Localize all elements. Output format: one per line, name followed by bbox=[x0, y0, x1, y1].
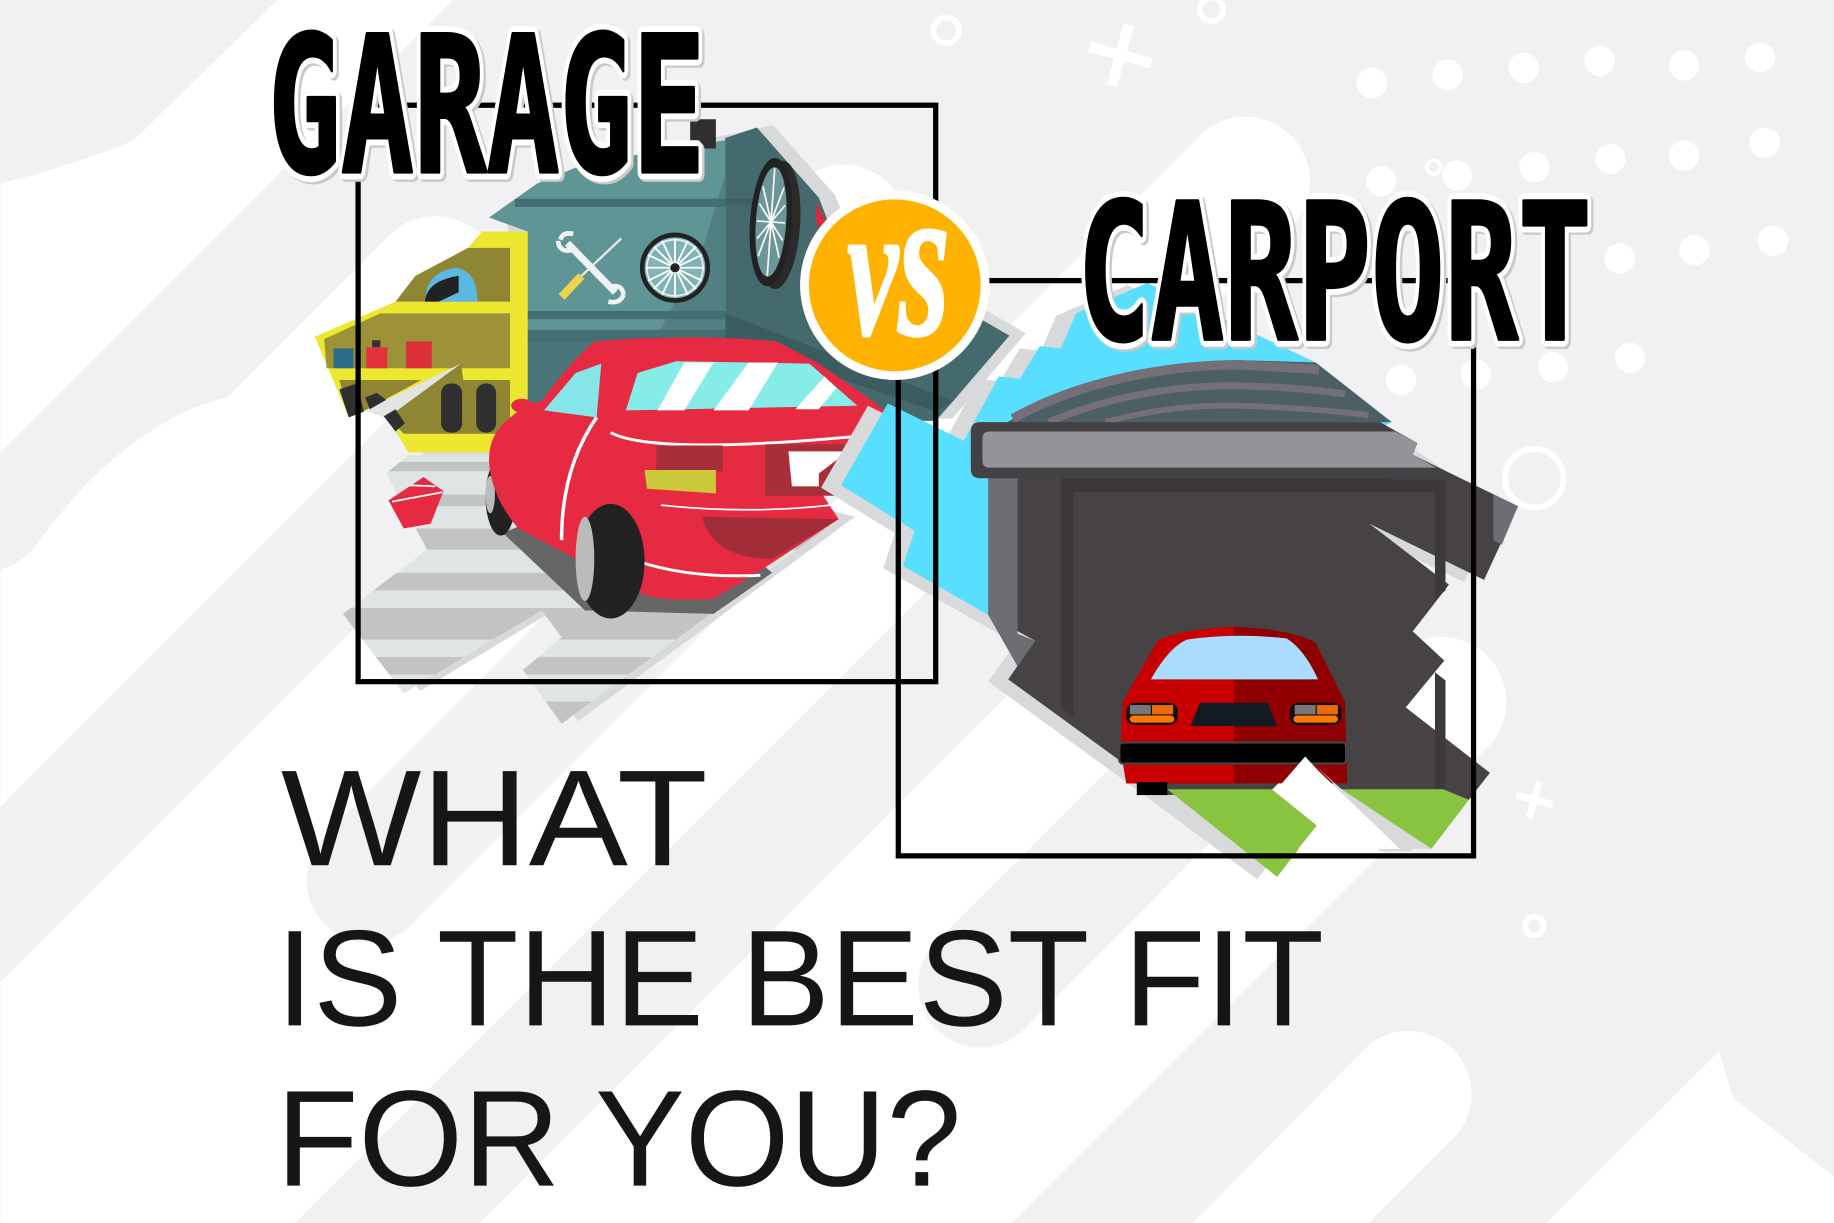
illustration: garage bbox=[315, 119, 1026, 731]
title: garage bbox=[268, 0, 708, 219]
frame: garage bbox=[358, 105, 936, 682]
red car rear view bbox=[1119, 627, 1347, 795]
car shadow bbox=[503, 468, 772, 614]
carport roof slab bbox=[971, 422, 1462, 479]
white torn notch bbox=[1275, 756, 1431, 849]
headline: WHAT bbox=[281, 741, 708, 894]
icon: spoked wheel on wall bbox=[642, 235, 708, 300]
headline: IS THE BEST FIT bbox=[276, 901, 1324, 1054]
carport roof arcs bbox=[1006, 360, 1392, 423]
title: carport bbox=[1077, 163, 1594, 386]
car rear window bbox=[626, 361, 857, 410]
illustration: carport bbox=[821, 283, 1518, 879]
rear window bbox=[1151, 636, 1318, 679]
icon: wrench and screwdriver bbox=[558, 233, 624, 302]
carport building bbox=[988, 455, 1518, 800]
icon: fuel cans bbox=[334, 340, 432, 368]
headline bbox=[276, 741, 1324, 1215]
tail lights bbox=[1126, 703, 1341, 725]
grass bbox=[1167, 789, 1469, 877]
decorative white dots bbox=[1357, 42, 1788, 395]
shelving unit bbox=[315, 232, 528, 452]
decorative rings and crosses bbox=[933, 0, 1564, 935]
sky bbox=[841, 283, 1392, 615]
garage wall bbox=[489, 119, 1009, 421]
title: garage: GARAGE bbox=[270, 0, 708, 219]
carport paper shadow bbox=[821, 285, 1498, 879]
title: garage: GARAGE bbox=[268, 0, 705, 217]
garage floor bbox=[343, 455, 834, 724]
icon: helmet bbox=[425, 268, 477, 302]
vs badge bbox=[800, 137, 989, 383]
vs badge: vs bbox=[847, 137, 950, 383]
headline: FOR YOU? bbox=[276, 1062, 961, 1215]
frame: carport bbox=[898, 281, 1474, 856]
garage paper shadow bbox=[359, 125, 1026, 721]
red sports car bbox=[486, 337, 885, 619]
icon: large wheel on side wall bbox=[745, 156, 805, 291]
title: garage: GARAGE bbox=[268, 0, 705, 217]
icon: red object on floor bbox=[389, 477, 443, 528]
